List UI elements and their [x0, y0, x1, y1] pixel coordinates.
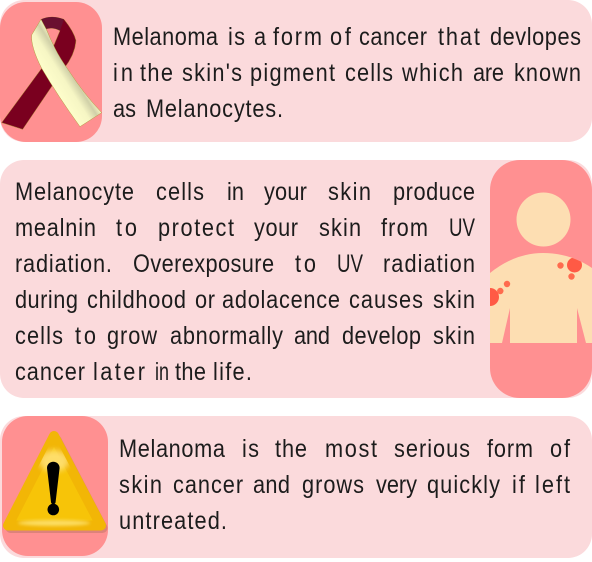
- text: causes of melanoma: to: [295, 250, 316, 277]
- text: causes of melanoma: to: [75, 322, 96, 349]
- text: melanoma definition: form: [273, 23, 322, 50]
- text: causes of melanoma: UV: [449, 214, 475, 241]
- text: melanoma definition: that: [438, 23, 480, 50]
- text: severity of melanoma: serious: [394, 435, 470, 462]
- text: causes of melanoma: your: [264, 178, 307, 205]
- text: causes of melanoma: radiation: [383, 250, 475, 277]
- text: causes of melanoma: cancer: [15, 358, 85, 385]
- panel: what is melanoma: [0, 0, 592, 142]
- text: causes of melanoma: mealnin: [15, 214, 96, 241]
- text: severity of melanoma: left: [535, 471, 570, 498]
- text: causes of melanoma: the: [175, 358, 206, 385]
- text: causes of melanoma: cells: [15, 322, 63, 349]
- text: causes of melanoma: protect: [158, 214, 234, 241]
- text: melanoma definition: are: [473, 59, 504, 86]
- text: causes of melanoma: Overexposure: [133, 250, 274, 277]
- text: causes of melanoma: your: [254, 214, 298, 241]
- text: severity of melanoma: is: [242, 435, 259, 462]
- text: causes of melanoma: in: [155, 358, 169, 385]
- text: causes of melanoma: Melanocyte: [15, 178, 134, 205]
- text: causes of melanoma: childhood: [87, 286, 186, 313]
- text: causes of melanoma: [15, 178, 475, 385]
- icon: awareness ribbon: [2, 17, 102, 129]
- text: melanoma definition: of: [330, 23, 351, 50]
- text: causes of melanoma: UV: [337, 250, 363, 277]
- text: melanoma definition: cells: [345, 59, 393, 86]
- text: severity of melanoma: very: [376, 471, 417, 498]
- text: severity of melanoma: grows: [302, 471, 364, 498]
- text: severity of melanoma: and: [253, 471, 290, 498]
- text: severity of melanoma: skin: [119, 471, 162, 498]
- text: melanoma definition: a: [254, 23, 267, 50]
- text: melanoma definition: [113, 23, 581, 122]
- text: severity of melanoma: [119, 435, 570, 534]
- icon: warning triangle: [8, 436, 102, 528]
- text: melanoma definition: is: [228, 23, 245, 50]
- text: causes of melanoma: from: [381, 214, 428, 241]
- text: causes of melanoma: adolacence: [222, 286, 340, 313]
- text: causes of melanoma: life.: [213, 358, 252, 385]
- text: melanoma definition: devlopes: [490, 23, 581, 50]
- text: severity of melanoma: of: [550, 435, 570, 462]
- text: causes of melanoma: cells: [156, 178, 204, 205]
- text: causes of melanoma: or: [195, 286, 215, 313]
- text: severity of melanoma: quickly: [427, 471, 500, 498]
- text: causes of melanoma: skin: [328, 178, 371, 205]
- text: causes of melanoma: skin: [433, 286, 475, 313]
- icon panel: ribbon: [0, 2, 102, 142]
- text: causes of melanoma: in: [227, 178, 244, 205]
- text: causes of melanoma: radiation.: [15, 250, 112, 277]
- text: melanoma definition: which: [401, 59, 463, 86]
- text: melanoma definition: as: [113, 95, 136, 122]
- text: causes of melanoma: later: [93, 358, 145, 385]
- icon panel: person: [490, 160, 592, 398]
- text: melanoma definition: skin's: [182, 59, 242, 86]
- text: melanoma definition: the: [140, 59, 173, 86]
- text: severity of melanoma: untreated.: [119, 507, 227, 534]
- text: severity of melanoma: cancer: [173, 471, 243, 498]
- text: causes of melanoma: develop: [342, 322, 421, 349]
- icon: person with skin lesions: [481, 192, 592, 343]
- text: causes of melanoma: grow: [107, 322, 157, 349]
- text: melanoma definition: Melanocytes.: [146, 95, 283, 122]
- panel: causes: [0, 160, 592, 398]
- text: melanoma definition: Melanoma: [113, 23, 219, 50]
- panel: severity warning: [0, 416, 592, 558]
- text: causes of melanoma: and: [294, 322, 330, 349]
- text: severity of melanoma: Melanoma: [119, 435, 226, 462]
- text: causes of melanoma: to: [116, 214, 137, 241]
- text: severity of melanoma: form: [487, 435, 533, 462]
- text: melanoma definition: known: [514, 59, 581, 86]
- text: severity of melanoma: most: [325, 435, 378, 462]
- text: melanoma definition: pigment: [250, 59, 335, 86]
- text: melanoma definition: cancer: [359, 23, 427, 50]
- text: causes of melanoma: skin: [319, 214, 361, 241]
- text: causes of melanoma: during: [15, 286, 78, 313]
- text: melanoma definition: in: [113, 59, 133, 86]
- text: causes of melanoma: causes: [349, 286, 423, 313]
- text: causes of melanoma: skin: [433, 322, 475, 349]
- text: causes of melanoma: produce: [393, 178, 475, 205]
- text: severity of melanoma: the: [275, 435, 307, 462]
- icon panel: warning: [2, 416, 108, 556]
- text: causes of melanoma: abnormally: [170, 322, 283, 349]
- text: severity of melanoma: if: [512, 471, 525, 498]
